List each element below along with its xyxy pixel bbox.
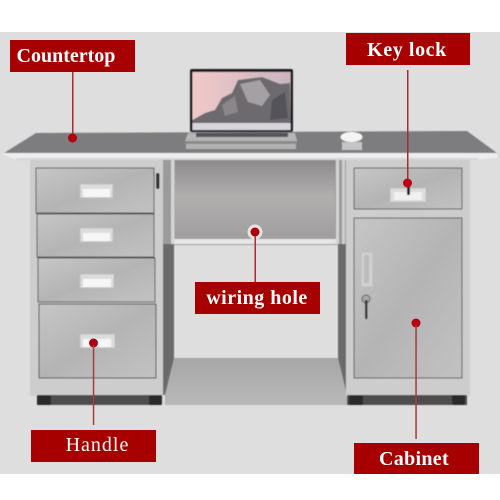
laptop	[185, 69, 297, 149]
drawer 4	[39, 304, 156, 378]
callout: Handle: Handle	[66, 434, 129, 456]
callout: wiring hole	[195, 224, 320, 314]
callout: Cabinet	[354, 318, 479, 474]
right drawer	[354, 168, 462, 209]
side lock	[156, 173, 160, 189]
callout: Key lock	[346, 33, 470, 188]
callout: Key lock: Key lock	[367, 39, 447, 61]
desk	[4, 69, 497, 405]
mouse	[340, 132, 362, 150]
drawer 1	[36, 168, 154, 213]
callout: Cabinet: Cabinet	[379, 448, 449, 470]
right pedestal	[338, 160, 470, 405]
cabinet door	[354, 218, 462, 378]
callout: wiring hole: wiring hole	[206, 287, 308, 309]
drawer 2	[37, 214, 154, 257]
countertop	[4, 131, 497, 160]
callout: Countertop	[10, 40, 135, 142]
left pedestal	[30, 160, 174, 405]
callout: Handle	[31, 338, 156, 462]
callout: Countertop: Countertop	[17, 45, 115, 67]
drawer 3	[38, 258, 155, 302]
floor shadow	[165, 358, 355, 405]
center back panel	[163, 160, 346, 245]
